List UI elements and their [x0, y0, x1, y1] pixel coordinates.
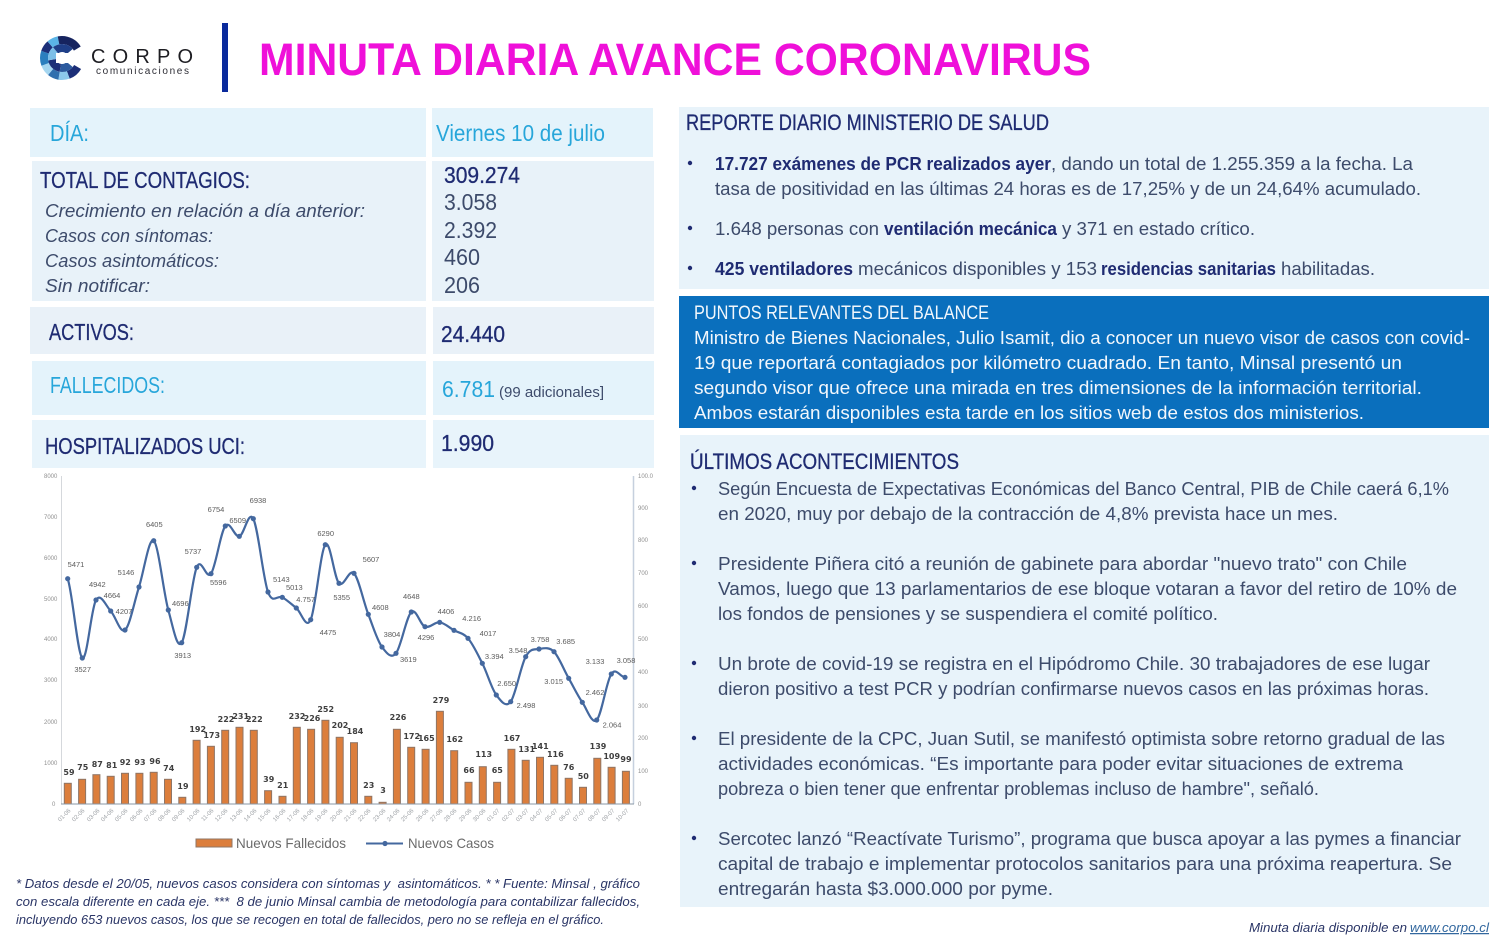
date axis labels: 04-07	[529, 808, 545, 823]
date axis labels: 22-06	[357, 808, 373, 823]
bar data labels: 59	[63, 768, 75, 777]
panel: total de contagios: Crecimiento en relación a día anterior:	[45, 201, 365, 221]
bar data labels: 87	[92, 760, 103, 769]
panel: total de contagios: 460	[444, 244, 480, 270]
date axis labels: 30-06	[472, 808, 488, 823]
right axis labels: 100	[638, 769, 649, 775]
date axis labels: 20-06	[329, 808, 345, 823]
left axis labels: 8000	[44, 474, 58, 480]
bar data labels: 139	[590, 742, 607, 751]
bar data labels: 192	[189, 725, 206, 734]
bullet: encuesta banco central	[692, 479, 1449, 524]
bullet: brote en Hipódromo Chile	[692, 654, 1430, 699]
panel: fallecidos: FALLECIDOS:	[50, 372, 165, 398]
logo: Corpo Comunicaciones: CORPO	[91, 46, 193, 68]
panel: reporte diario ministerio de salud	[679, 107, 1489, 289]
date axis labels: 18-06	[300, 808, 316, 823]
bullet: presidente Piñera: los fondos de pensiones y se suspendiera el comité político.	[718, 604, 1218, 624]
panel: día	[30, 108, 653, 157]
date axis labels: 10-06	[186, 808, 202, 823]
line data labels: 2.498	[517, 701, 535, 710]
right axis labels: 300	[638, 704, 649, 710]
panel: fallecidos	[32, 361, 654, 415]
bullet: presidente de la CPC	[692, 729, 1445, 799]
panel: total de contagios: Casos con síntomas:	[45, 226, 213, 246]
date axis labels: 02-06	[71, 808, 87, 823]
footnote: * Datos desde el 20/05, nuevos casos considera con síntomas y asintomáticos. * * Fuente: Minsal , gráfico	[16, 877, 640, 891]
line data labels: 3.015	[544, 677, 563, 686]
right axis labels: 900	[638, 506, 649, 512]
bar data labels: 66	[463, 766, 475, 775]
logo: Corpo Comunicaciones: comunicaciones	[96, 66, 189, 77]
date axis labels: 01-06	[57, 808, 73, 823]
title: MINUTA DIARIA AVANCE CORONAVIRUS	[259, 34, 1091, 85]
line data labels: 2.064	[603, 720, 621, 730]
line data labels: 3804	[384, 630, 400, 639]
bar data labels: 74	[163, 764, 175, 773]
bullet: brote en Hipódromo Chile: Un brote de covid-19 se registra en el Hipódromo Chile. 30 trabajadores de ese lugar	[718, 654, 1430, 674]
panel: total de contagios: Sin notificar:	[45, 276, 150, 296]
line data labels: 5596	[210, 578, 227, 587]
right axis labels: 800	[638, 538, 649, 544]
bullet: presidente de la CPC: actividades económicas. “Es importante para poder evitar situaciones de extrema	[718, 754, 1404, 774]
bullet: presidente Piñera: Vamos, luego que 13 parlamentarios de ese bloque votaran a favor del retiro de 10% de	[718, 579, 1457, 599]
bullet: ventiladores y residencias: residencias sanitarias	[1101, 259, 1276, 279]
panel: puntos relevantes del balance	[679, 296, 1489, 428]
bullet: presidente Piñera	[692, 554, 1457, 624]
bar data labels: 279	[433, 696, 450, 705]
left axis labels: 0	[52, 802, 56, 808]
date axis labels: 27-06	[429, 808, 445, 823]
line data labels: 4648	[403, 592, 420, 601]
footnote: con escala diferente en cada eje. *** 8 de junio Minsal cambia de metodología para contabilizar fallecidos,	[16, 895, 640, 909]
line data labels: 3.685	[556, 637, 575, 646]
line data labels: 3.133	[586, 657, 604, 666]
right axis labels: 100.0	[638, 474, 654, 480]
bullet: brote en Hipódromo Chile: dieron positivo a test PCR y podrían confirmarse nuevos casos en las próximas horas.	[718, 679, 1429, 699]
date axis labels: 08-07	[587, 808, 603, 823]
date axis labels: 04-06	[100, 808, 116, 823]
line data labels: 3913	[174, 651, 191, 660]
bar data labels: 39	[263, 775, 275, 784]
date axis labels: 12-06	[214, 808, 230, 823]
bullet: ventiladores y residencias: 425 ventiladores	[715, 259, 853, 279]
bar data labels: 165	[418, 734, 435, 743]
date axis labels: 06-06	[129, 808, 145, 823]
panel: hospitalizados UCI: HOSPITALIZADOS UCI:	[45, 433, 245, 459]
panel: total de contagios: TOTAL DE CONTAGIOS:	[40, 167, 250, 193]
line data labels: 5146	[118, 568, 134, 577]
line data labels: 6754	[208, 505, 224, 514]
bar data labels: 172	[403, 732, 420, 741]
bullet: ventiladores y residencias: habilitadas.	[1281, 259, 1375, 279]
footer link note: www.corpo.cl	[1410, 921, 1490, 935]
line data labels: 3.058	[617, 656, 635, 665]
line data labels: 5355	[333, 593, 350, 602]
line data labels: 5471	[68, 560, 84, 569]
line data labels: 4696	[172, 599, 189, 608]
right axis labels: 200	[638, 736, 649, 742]
panel: total de contagios: 206	[444, 272, 480, 298]
date axis labels: 05-07	[544, 808, 560, 823]
bar data labels: 231	[232, 712, 249, 721]
bullet: exámenes PCR	[688, 154, 1421, 199]
date axis labels: 01-07	[486, 808, 502, 823]
bar data labels: 222	[218, 715, 234, 724]
bar data labels: 173	[203, 731, 220, 740]
date axis labels: 14-06	[243, 808, 259, 823]
panel: activos: ACTIVOS:	[49, 319, 134, 345]
combo chart: nuevos fallecidos y nuevos casos	[44, 474, 654, 851]
bar data labels: 109	[603, 752, 620, 761]
line data labels: 5607	[363, 555, 379, 564]
panel: total de contagios	[32, 161, 654, 301]
date axis labels: 02-07	[501, 808, 517, 823]
date axis labels: 06-07	[558, 808, 574, 823]
line data labels: 3.394	[485, 652, 504, 661]
bar data labels: 116	[547, 750, 564, 759]
bullet: ventiladores y residencias	[688, 259, 1375, 279]
right axis labels	[638, 474, 654, 808]
line data labels: 3.758	[531, 635, 549, 644]
right axis labels: 0	[638, 802, 642, 808]
date axis labels: 19-06	[314, 808, 330, 823]
date axis labels: 25-06	[400, 808, 416, 823]
date axis labels: 08-06	[157, 808, 173, 823]
footnote	[16, 877, 640, 927]
bullet: encuesta banco central: Según Encuesta de Expectativas Económicas del Banco Central, PIB de Chile caerá 6,1%	[718, 479, 1449, 499]
panel: fallecidos: (99 adicionales]	[499, 384, 604, 401]
bar data labels: 184	[347, 727, 364, 736]
date axis labels: 09-06	[171, 808, 187, 823]
left axis labels: 7000	[44, 515, 58, 521]
chart legend	[196, 835, 494, 851]
bullet: Sercotec: entregarán hasta $3.000.000 por pyme.	[718, 879, 1053, 899]
line: nuevos casos	[68, 517, 625, 721]
panel: puntos relevantes del balance: 19 que reportará contagiados por kilómetro cuadrado. En tanto, Minsal presentó un	[694, 353, 1402, 373]
left axis labels: 1000	[44, 761, 58, 767]
date axis labels: 07-06	[143, 808, 159, 823]
line data labels: 2.650	[497, 679, 516, 688]
bar data labels: 99	[620, 755, 632, 764]
date axis labels: 21-06	[343, 808, 359, 823]
bullet: presidente Piñera: Presidente Piñera citó a reunión de gabinete para abordar "nuevo trato" con Chile	[718, 554, 1407, 574]
bar data labels: 113	[475, 750, 492, 759]
bar data labels: 232	[289, 712, 305, 721]
heading: reporte diario: REPORTE DIARIO MINISTERIO DE SALUD	[686, 110, 1049, 135]
date axis labels: 15-06	[257, 808, 273, 823]
left axis labels: 5000	[44, 597, 58, 603]
bar data labels: 76	[563, 763, 575, 772]
bullet: presidente de la CPC: pobreza o bien tener que enfrentar problemas incluso de hambre", señaló.	[718, 779, 1319, 799]
date axis labels: 10-07	[615, 808, 631, 823]
line data labels: 4.216	[462, 614, 481, 623]
line data labels: 3527	[74, 665, 91, 674]
bullet: ventilación mecánica: y 371 en estado crítico.	[1062, 219, 1255, 239]
line data labels: 4475	[320, 628, 336, 637]
right axis labels: 400	[638, 670, 649, 676]
date axis labels: 03-07	[515, 808, 531, 823]
logo: Corpo Comunicaciones	[44, 40, 193, 77]
date axis labels: 11-06	[201, 808, 216, 823]
line data labels: 4296	[418, 633, 434, 642]
bullet: presidente de la CPC: El presidente de la CPC, Juan Sutil, se manifestó optimista sobre retorno gradual de las	[718, 729, 1445, 749]
panel: total de contagios: Casos asintomáticos:	[45, 251, 219, 271]
line data labels: 4608	[372, 603, 389, 612]
bar data labels: 162	[446, 735, 463, 744]
bars: nuevos fallecidos	[64, 711, 629, 804]
left axis labels: 4000	[44, 637, 58, 643]
line data labels: 4664	[104, 591, 120, 600]
date axis labels: 09-07	[601, 808, 617, 823]
bullet: Sercotec: Sercotec lanzó “Reactívate Turismo”, programa que busca apoyar a las pymes a financiar	[718, 829, 1461, 849]
bullet: encuesta banco central: en 2020, muy por debajo de la contracción de 4,8% prevista hace un mes.	[718, 504, 1338, 524]
date axis labels: 17-06	[286, 808, 302, 823]
bar data labels: 81	[106, 761, 118, 770]
right axis labels: 500	[638, 637, 649, 643]
line data labels: 6405	[146, 520, 163, 529]
line data labels: 3.548	[509, 646, 527, 655]
left axis labels	[44, 474, 58, 808]
line data labels: 6938	[250, 496, 266, 505]
footer link note: Minuta diaria disponible en	[1249, 921, 1407, 935]
line data labels: 5143	[273, 575, 290, 584]
chart legend: Nuevos Casos	[408, 835, 494, 851]
bar data labels: 252	[317, 705, 334, 714]
bar data labels: 75	[77, 763, 89, 772]
line markers	[65, 516, 628, 723]
bar data labels: 141	[532, 742, 549, 751]
line data labels: 4942	[89, 580, 106, 589]
line data labels: 5737	[185, 547, 201, 556]
panel: total de contagios: 2.392	[444, 217, 497, 243]
bar data labels: 131	[518, 745, 535, 754]
panel: hospitalizados UCI	[32, 420, 654, 468]
date axis labels: 29-06	[458, 808, 474, 823]
date axis labels: 13-06	[229, 808, 245, 823]
left axis labels: 2000	[44, 720, 58, 726]
chart legend: Nuevos Fallecidos	[236, 835, 346, 851]
line data labels: 4406	[438, 607, 454, 616]
bar data labels: 226	[304, 714, 321, 723]
date axis labels: 26-06	[415, 808, 431, 823]
bar data labels: 3	[380, 786, 386, 795]
bar data labels: 50	[578, 772, 589, 781]
date axis labels: 23-06	[372, 808, 388, 823]
line data labels: 2.462	[586, 688, 604, 697]
line data labels: 4017	[480, 629, 496, 638]
panel: puntos relevantes del balance: PUNTOS RELEVANTES DEL BALANCE	[694, 303, 989, 324]
bar data labels: 92	[120, 758, 131, 767]
footer link note	[1249, 921, 1490, 935]
line data labels: 4.757	[296, 595, 315, 604]
bullet: exámenes PCR: tasa de positividad en las últimas 24 horas es de 17,25% y de un 24,64% acumulado.	[715, 179, 1421, 199]
panel: día: DÍA:	[50, 120, 89, 146]
left axis labels: 6000	[44, 556, 58, 562]
bar data labels: 23	[363, 781, 374, 790]
panel: puntos relevantes del balance: Ambos estarán disponibles esta tarde en los sitios web de estos dos ministerios.	[694, 403, 1364, 423]
date axis labels: 03-06	[86, 808, 102, 823]
right axis labels: 700	[638, 571, 649, 577]
bullet: Sercotec: capital de trabajo e implementar protocolos sanitarios para una próxima reapertura. Se	[718, 854, 1452, 874]
bullet: exámenes PCR: , dando un total de 1.255.359 a la fecha. La	[1051, 154, 1414, 174]
date axis labels: 07-07	[572, 808, 588, 823]
bullet: exámenes PCR: 17.727 exámenes de PCR realizados ayer	[715, 154, 1051, 174]
date axis labels: 28-06	[443, 808, 459, 823]
left axis labels: 3000	[44, 678, 58, 684]
header divider bar	[222, 23, 228, 92]
date axis labels	[57, 808, 631, 823]
date axis labels: 05-06	[114, 808, 130, 823]
bar data labels: 222	[246, 715, 263, 724]
bullet: ventilación mecánica	[688, 219, 1255, 239]
panel: activos: 24.440	[441, 321, 505, 347]
bar data labels: 226	[390, 713, 407, 722]
bullet: ventiladores y residencias: mecánicos disponibles y 153	[858, 259, 1097, 279]
bullet: ventilación mecánica: ventilación mecánica	[884, 219, 1058, 239]
bar data labels: 21	[277, 781, 289, 790]
panel: hospitalizados UCI: 1.990	[441, 430, 494, 456]
panel: activos	[30, 307, 654, 354]
footnote: incluyendo 653 nuevos casos, los que se recogen en total de fallecidos, pero no se refleja en el gráfico.	[16, 913, 604, 927]
line data labels: 3619	[400, 655, 417, 664]
right axis labels: 600	[638, 604, 649, 610]
line data labels	[68, 496, 635, 730]
panel: día: Viernes 10 de julio	[436, 120, 605, 146]
bar data labels: 202	[332, 721, 348, 730]
line data labels: 6509	[229, 516, 246, 525]
bar data labels	[63, 696, 632, 795]
bar data labels: 19	[177, 782, 189, 791]
heading: últimos acontecimientos: ÚLTIMOS ACONTECIMIENTOS	[690, 449, 959, 474]
bar data labels: 167	[504, 734, 520, 743]
panel: total de contagios: 3.058	[444, 189, 497, 215]
panel: últimos acontecimientos	[680, 435, 1489, 907]
bullet: ventilación mecánica: 1.648 personas con	[715, 219, 879, 239]
bullet: Sercotec	[692, 829, 1461, 899]
line data labels: 6290	[317, 529, 334, 538]
panel: fallecidos: 6.781	[442, 376, 495, 402]
date axis labels: 16-06	[272, 808, 288, 823]
bar data labels: 93	[134, 758, 146, 767]
panel: puntos relevantes del balance: Ministro de Bienes Nacionales, Julio Isamit, dio a conocer un nuevo visor de casos con covid-	[694, 328, 1470, 348]
line data labels: 4207	[116, 607, 132, 616]
bar data labels: 65	[492, 766, 503, 775]
panel: total de contagios: 309.274	[444, 162, 520, 188]
line data labels: 5013	[286, 583, 303, 592]
panel: puntos relevantes del balance: segundo visor que ofrece una mirada en tres dimensiones de la información territorial.	[694, 378, 1422, 398]
date axis labels: 24-06	[386, 808, 402, 823]
bar data labels: 96	[149, 757, 161, 766]
